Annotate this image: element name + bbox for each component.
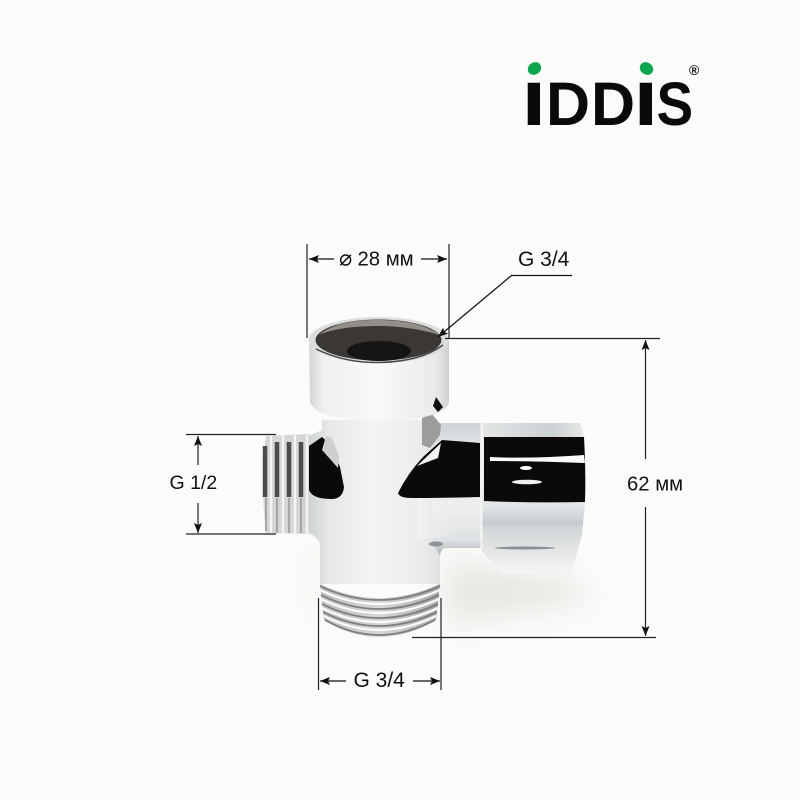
right dark reflection (398, 440, 480, 498)
left dark reflection (309, 437, 344, 499)
dimension: G 3/4 bottom (318, 598, 441, 692)
logo letter S: S (656, 70, 693, 139)
neck chrome notch (422, 414, 441, 448)
body-arm blend (418, 498, 452, 538)
diameter label: 28 мм (358, 248, 414, 270)
bottom thread (320, 584, 440, 637)
main body (309, 420, 440, 584)
product: chrome valve (263, 317, 590, 637)
soft shadow (445, 560, 590, 625)
upper collar (309, 340, 449, 421)
callout: G 3/4 top (438, 248, 572, 337)
bottom G 3/4 label: G 3/4 (354, 669, 405, 692)
arm fillet spot (429, 542, 443, 546)
logo letter I: I (522, 70, 546, 138)
left thread nipple (263, 434, 309, 535)
diameter label: ⌀ (339, 246, 352, 270)
callout: G 3/4 top: G 3/4 (518, 248, 570, 271)
G 1/2 label: G 1/2 (170, 472, 217, 494)
dimension: G 1/2 (170, 434, 276, 534)
62 mm label: 62 мм (627, 474, 683, 496)
right arm (432, 423, 482, 556)
inner bore (347, 341, 411, 361)
left highlight (322, 436, 339, 468)
logo letter D: D (591, 70, 635, 138)
dimension: 62 mm (412, 338, 683, 638)
left shadow (304, 550, 320, 615)
dimension: diameter 28 mm (307, 244, 449, 338)
logo registered mark: ® (689, 62, 700, 78)
collar rim (308, 317, 448, 363)
inner thread (318, 320, 440, 335)
rim front edge (316, 345, 443, 363)
logo letter I: I (634, 70, 658, 138)
logo green dot right (637, 60, 656, 77)
right highlight (417, 443, 441, 466)
collar opening (316, 320, 442, 360)
logo: IDDIS (522, 60, 700, 139)
logo letter D: D (546, 70, 590, 138)
neck black diamond (433, 397, 443, 412)
logo green dot left (525, 60, 544, 77)
rotary cap (481, 423, 585, 574)
